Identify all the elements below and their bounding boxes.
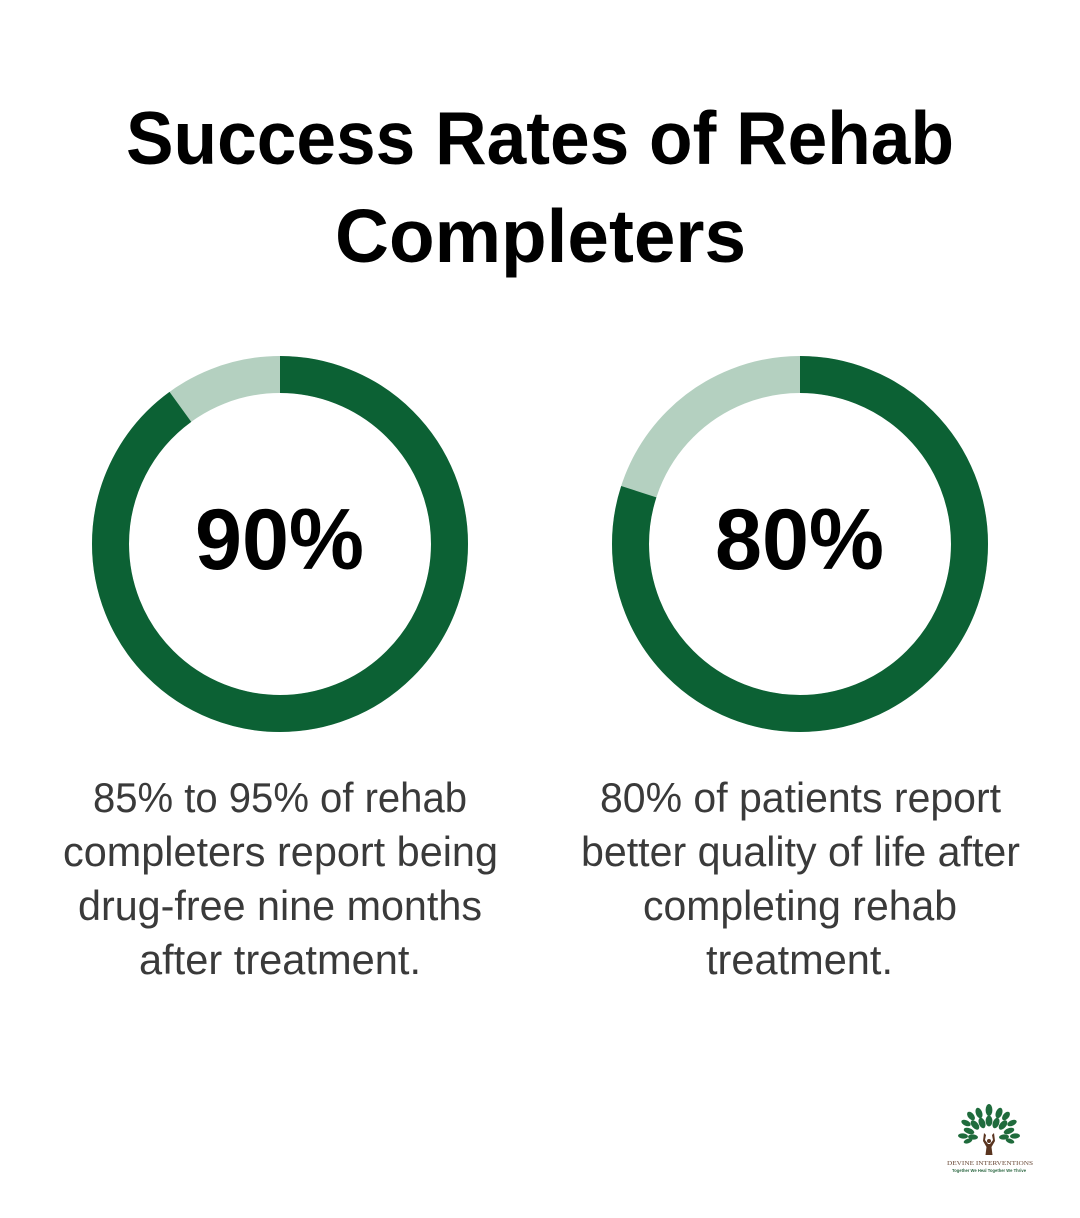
text block: drug-free description: 85% to 95% of rehab: [93, 774, 467, 821]
text block: quality of life description: [581, 774, 1020, 983]
donut value: 90%: 90%: [195, 492, 364, 588]
text block: drug-free description: [63, 774, 498, 983]
panel: 80 percent stat: [581, 374, 1020, 983]
panel: 90 percent stat: [63, 374, 498, 983]
title: Completers: [335, 194, 746, 278]
donut value: 80%: 80%: [715, 492, 884, 588]
text block: drug-free description: after treatment.: [139, 936, 421, 983]
text block: quality of life description: completing rehab: [643, 882, 957, 929]
logo tagline: Together We Heal Together We Thrive: [952, 1168, 1026, 1173]
logo: Devine Interventions: [947, 1104, 1033, 1173]
chart: 90 percent donut: [110, 374, 450, 714]
text block: quality of life description: better quality of life after: [581, 828, 1020, 875]
text block: quality of life description: treatment.: [706, 936, 893, 983]
title: [126, 96, 954, 278]
text block: drug-free description: drug-free nine months: [78, 882, 482, 929]
chart: 80 percent donut: [630, 374, 970, 714]
text block: drug-free description: completers report being: [63, 828, 498, 875]
text block: quality of life description: 80% of patients report: [600, 774, 1001, 821]
logo name: DEVINE INTERVENTIONS: [947, 1160, 1033, 1167]
title: Success Rates of Rehab: [126, 96, 954, 180]
icon: trunk figure: [983, 1133, 995, 1155]
icon: tree: [958, 1104, 1020, 1145]
